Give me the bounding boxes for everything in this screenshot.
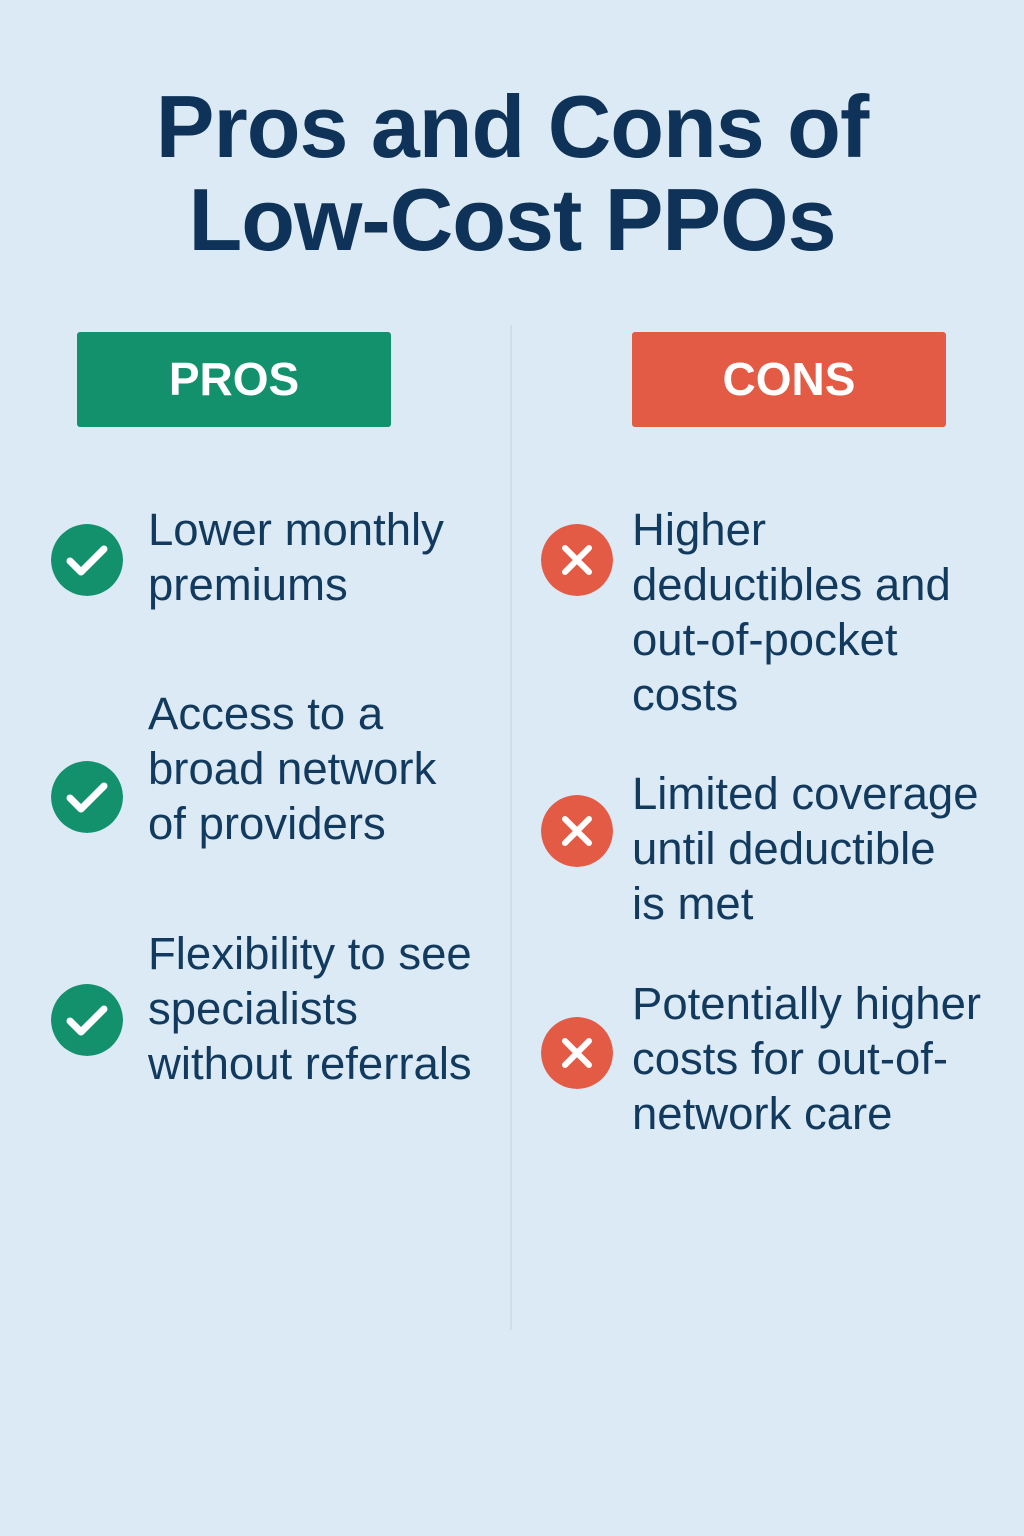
pro item 1: Lower monthly (148, 504, 444, 555)
pro item 1 (51, 504, 444, 610)
pro item 2: Access to a (148, 688, 383, 739)
con item 1: out-of-pocket (632, 614, 898, 665)
con item 2: Limited coverage (632, 768, 978, 819)
pro item 3: specialists (148, 983, 358, 1034)
con item 2: is met (632, 878, 753, 929)
icon: check (51, 984, 123, 1056)
title: Low-Cost PPOs (188, 170, 836, 269)
con item 3 (541, 978, 981, 1139)
pro item 2: broad network (148, 743, 436, 794)
icon: cross (541, 795, 613, 867)
icon: cross (541, 524, 613, 596)
con item 1: Higher (632, 504, 766, 555)
title: Pros and Cons of (156, 77, 868, 176)
cons header: CONS (723, 353, 855, 405)
con item 1: deductibles and (632, 559, 951, 610)
con item 2: until deductible (632, 823, 936, 874)
icon: check (51, 761, 123, 833)
con item 2 (541, 768, 978, 929)
con item 1: costs (632, 669, 738, 720)
cons header (632, 332, 946, 427)
pro item 2 (51, 688, 436, 849)
con item 3: Potentially higher (632, 978, 981, 1029)
pro item 3: Flexibility to see (148, 928, 472, 979)
pro item 2: of providers (148, 798, 386, 849)
pros header (77, 332, 391, 427)
icon: check (51, 524, 123, 596)
con item 3: network care (632, 1088, 892, 1139)
pros header: PROS (169, 353, 299, 405)
con item 3: costs for out-of- (632, 1033, 948, 1084)
pro item 3: without referrals (148, 1038, 472, 1089)
pro item 3 (51, 928, 472, 1089)
title (156, 77, 870, 269)
icon: cross (541, 1017, 613, 1089)
pro item 1: premiums (148, 559, 348, 610)
con item 1 (541, 504, 951, 720)
